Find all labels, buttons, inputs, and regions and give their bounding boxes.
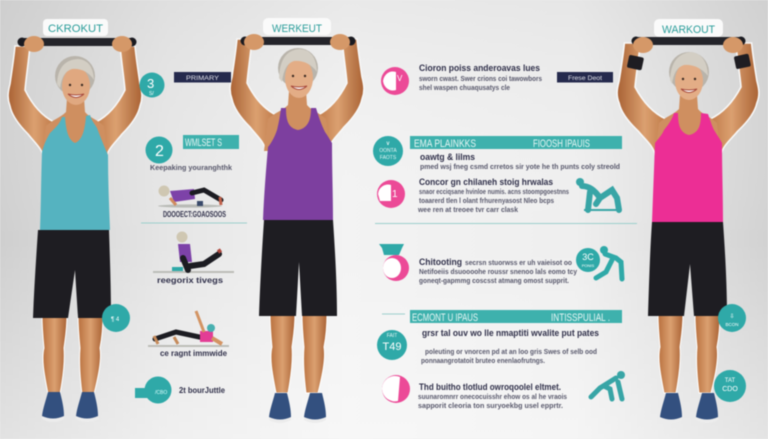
badge 3 bbox=[140, 72, 164, 98]
text block 3: wee ren at treoee tvr carr clask bbox=[417, 205, 519, 214]
teal bar heading 2: ECMONT U IPAUS bbox=[412, 312, 478, 324]
arms bbox=[8, 46, 142, 158]
teal bar heading 2 bbox=[410, 310, 622, 324]
teal circle right 1: ⇩ bbox=[729, 313, 735, 320]
text block 2: pmed wsj fneg csmd crretos sir yote he th punts coly streold bbox=[420, 162, 620, 171]
shorts bbox=[33, 230, 111, 318]
teal circle right 1: BCON bbox=[725, 322, 739, 327]
hair and face bbox=[278, 48, 318, 98]
teal circle right 2 bbox=[714, 370, 746, 402]
text block 4: secrsn stuorwss er uh vaieisot oo bbox=[465, 258, 572, 267]
text block 3 bbox=[417, 177, 569, 214]
teal badge and figure: PONIS bbox=[582, 263, 595, 268]
teal tank top bbox=[40, 115, 110, 230]
bar and hands bbox=[18, 36, 136, 52]
shorts bbox=[648, 222, 727, 316]
badge 3: 3 bbox=[147, 76, 154, 91]
neck and chest bbox=[655, 95, 721, 155]
teal circle right 2: TAT bbox=[725, 378, 736, 384]
text block 4: Netifoeiis dsuoooohe roussr snenoo lals eomo tcy bbox=[419, 267, 578, 276]
text block 1: sworn cwast. Swer crions coi tawowbors bbox=[419, 74, 542, 83]
text block 5: poleuting or vnorcen pd at an loo gris Swes of selb ood bbox=[425, 347, 597, 356]
legs bbox=[42, 314, 103, 394]
pink tank top bbox=[652, 113, 723, 222]
text block 6: Thd buitho tlotlud owroqoolel eltmet. bbox=[419, 382, 561, 393]
teal figure: press up bbox=[591, 371, 625, 399]
bar and hands bbox=[632, 36, 746, 53]
arms bbox=[617, 43, 759, 155]
text block 3: toaarerd tlen l olant frhurenyasost Nleo bcps bbox=[419, 196, 554, 205]
bar and hands bbox=[240, 34, 356, 50]
shoes bbox=[660, 393, 718, 423]
exercise figure: seated leg raise bbox=[153, 232, 234, 273]
teal badge and figure bbox=[576, 246, 622, 279]
label: WARKOUT: WARKOUT bbox=[662, 24, 715, 36]
pink icon 1 bbox=[381, 67, 409, 95]
pink icon 3 bbox=[382, 375, 410, 403]
woman in teal tank top, left bbox=[8, 19, 142, 422]
badge T49 bbox=[377, 330, 407, 360]
badge 3: S/ bbox=[149, 91, 154, 97]
text block 4: Chitooting bbox=[419, 257, 462, 268]
text block 4 bbox=[419, 257, 578, 285]
label: WERKEUT: WERKEUT bbox=[272, 23, 322, 35]
text block 1: shel waspen chuaqusatys cle bbox=[419, 83, 510, 92]
neck and chest bbox=[42, 98, 108, 158]
teal circle right 1 bbox=[718, 304, 746, 332]
label: WARKOUT bbox=[654, 19, 723, 37]
teal figure: bent pose bbox=[576, 178, 620, 211]
badge T49: FAIT bbox=[387, 333, 397, 339]
woman in purple tank top, centre bbox=[230, 18, 364, 423]
badge with tab bbox=[135, 376, 172, 404]
hair and face bbox=[669, 52, 709, 100]
badge with tab: /CBO bbox=[155, 390, 167, 396]
pink icon 2: 1 bbox=[392, 189, 398, 200]
exercise figure: floor arm raise bbox=[148, 311, 229, 347]
text block 5 bbox=[421, 328, 599, 365]
woman in pink tank top, right bbox=[617, 19, 759, 423]
label: CKROKUT: CKROKUT bbox=[48, 23, 103, 35]
text block 6 bbox=[418, 382, 567, 410]
dark label left bbox=[174, 72, 231, 82]
text block 1 bbox=[419, 63, 542, 92]
text block 3: Concor gn chilaneh stoig hrwalas bbox=[419, 177, 553, 188]
text block 3: snaor ecciqsane hvinloe numis. acns stoompgoestnns bbox=[419, 187, 569, 196]
caption: ce ragnt immwide bbox=[160, 348, 227, 358]
exercise figure: plank bbox=[158, 186, 222, 208]
teal badge and figure: 3C bbox=[582, 252, 594, 262]
pink icon 1: V bbox=[397, 74, 403, 83]
shoes bbox=[42, 392, 98, 422]
text block 5: ponnaangrotatoit bruteo enenlaofrutngs. bbox=[421, 356, 545, 365]
teal badge: OONTA bbox=[379, 148, 397, 154]
badge T49: T49 bbox=[383, 341, 401, 353]
text block 2 bbox=[420, 152, 620, 171]
shoes bbox=[269, 393, 326, 423]
legs bbox=[270, 313, 327, 393]
caption: reegorix tivegs bbox=[157, 275, 223, 285]
text block 5: grsr tal ouv wo lle nmaptiti wvalite put pates bbox=[422, 328, 599, 339]
teal circle on left figure bbox=[102, 304, 130, 332]
dark label centre bbox=[557, 72, 613, 82]
text block 4: goneqt-gapmmg coscsst atmang omost supprit. bbox=[419, 276, 569, 285]
text block 1: Cioron poiss anderoavas lues bbox=[419, 63, 540, 74]
hair and face bbox=[55, 56, 95, 105]
badge 2 bbox=[146, 136, 172, 164]
teal badge: ∨ bbox=[386, 141, 390, 147]
purple tank top bbox=[263, 108, 333, 220]
label: WERKEUT bbox=[263, 18, 331, 35]
teal bar heading 1: EMA PLAINKKS bbox=[414, 138, 476, 150]
badge 2: 2 bbox=[155, 143, 164, 160]
pink icon 2 bbox=[377, 180, 405, 208]
neck and chest bbox=[264, 91, 330, 151]
text block 6: suunaromnrr onecocuisshr ehow os al he vraois bbox=[418, 392, 567, 401]
wristbands bbox=[627, 53, 751, 71]
label: CKROKUT bbox=[43, 19, 108, 36]
teal circle right 2: CDO bbox=[722, 386, 738, 393]
shorts bbox=[259, 220, 337, 316]
teal bar heading 1 bbox=[410, 136, 622, 150]
arms bbox=[230, 39, 364, 151]
text block 6: sapporit cleoria ton suryoekbg usel epprtr. bbox=[418, 401, 563, 410]
teal badge: FAOTS bbox=[380, 155, 397, 161]
teal tab over pink ball bbox=[379, 244, 409, 281]
text block 2: oawtg & lilms bbox=[420, 152, 475, 163]
teal bar heading 2: INTISSPULIAL . bbox=[551, 312, 610, 324]
caption: Keepaking youranghthk bbox=[150, 163, 233, 172]
teal badge bbox=[373, 136, 403, 166]
teal heading WMLSET S: WMLSET S bbox=[185, 137, 222, 149]
teal bar heading 1: FIOOSH IPAUIS bbox=[533, 138, 590, 150]
teal circle on left figure: ¶ 4 bbox=[111, 317, 120, 323]
dark label centre: Frese Deot bbox=[568, 75, 602, 82]
caption: DOOOECT:GOAOSOOS bbox=[163, 209, 226, 219]
caption: 2t bourJuttle bbox=[179, 385, 225, 395]
legs bbox=[658, 313, 720, 393]
dark label left: PRIMARY bbox=[186, 75, 220, 82]
